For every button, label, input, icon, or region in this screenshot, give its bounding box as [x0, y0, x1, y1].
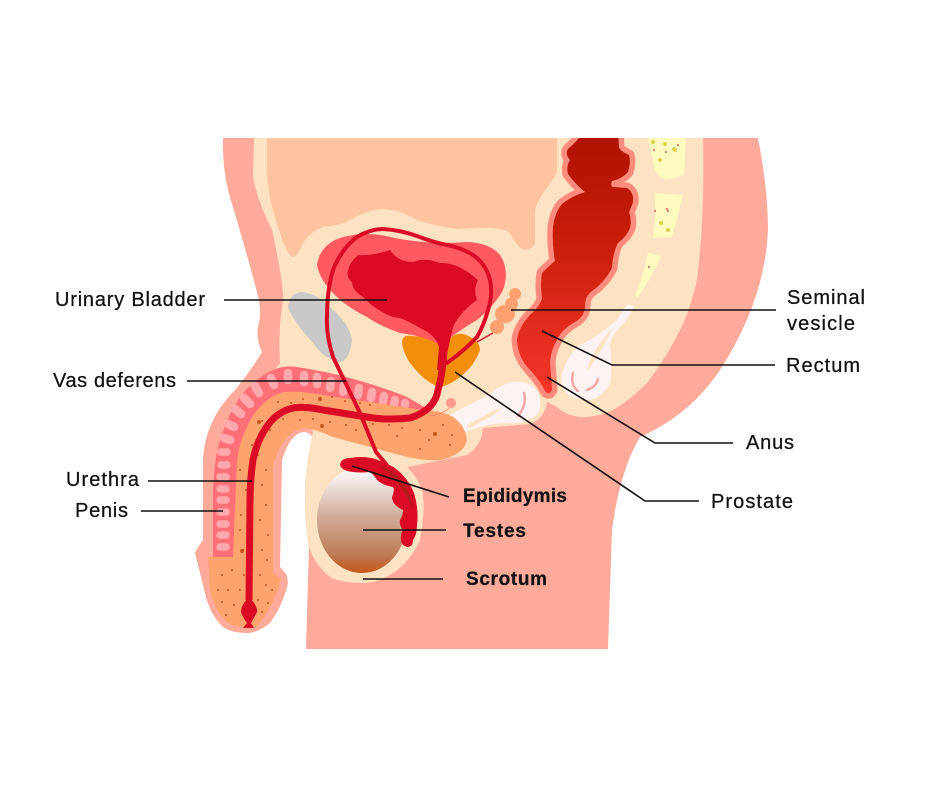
label: rectum: Rectum: [786, 355, 860, 377]
seminal vesicle: [477, 288, 521, 342]
tissue speckles: [218, 397, 452, 615]
line: testes: [363, 529, 446, 531]
label lines: [141, 300, 776, 579]
label: penis: Penis: [75, 500, 128, 522]
label: seminal vesicle: [787, 287, 865, 335]
label: prostate: Prostate: [711, 491, 793, 513]
line: anus: [547, 377, 733, 443]
body silhouette: [195, 138, 768, 649]
epididymis: [340, 457, 418, 547]
urinary bladder: [317, 234, 506, 370]
label: epididymis: Epididymis: [463, 486, 567, 507]
line: urethra: [148, 480, 252, 482]
anatomy diagram: [52, 138, 864, 649]
label: seminal vesicle: Seminal: [787, 287, 865, 309]
label: urinary bladder: Urinary Bladder: [55, 289, 205, 311]
cowper gland: [430, 398, 456, 416]
coccyx and anal tissue: [562, 305, 634, 400]
line: scrotum: [363, 578, 443, 580]
label: anus: Anus: [746, 432, 794, 454]
pelvic tissue and scrotum: [253, 138, 703, 583]
line: rectum: [542, 331, 775, 365]
urethra: [241, 350, 444, 628]
label: vas deferens: Vas deferens: [53, 370, 176, 392]
corpus cavernosum: [213, 366, 426, 557]
line: vas deferens: [187, 380, 346, 382]
line: epididymis: [352, 466, 449, 497]
bulb of penis and ducts: [448, 382, 540, 434]
pubic bone: [288, 292, 352, 362]
line: penis: [141, 510, 223, 512]
line: seminal vesicle: [511, 309, 776, 311]
rectum: [517, 130, 633, 393]
label: urethra: Urethra: [66, 469, 140, 491]
line: urinary bladder: [224, 299, 387, 301]
label: scrotum: Scrotum: [466, 569, 547, 590]
sacrum bones: [635, 138, 686, 298]
label: testes: Testes: [463, 521, 526, 542]
corpus cavernosum chambers: [220, 373, 405, 547]
label: seminal vesicle: vesicle: [787, 313, 855, 335]
line: prostate: [455, 372, 699, 501]
bladder lumen: [348, 250, 478, 370]
bladder wall: [317, 234, 506, 345]
abdominal cavity: [267, 138, 557, 257]
prostate: [402, 334, 480, 387]
vas deferens: [327, 229, 491, 464]
corpus spongiosum: [208, 392, 467, 627]
testis: [317, 467, 407, 573]
